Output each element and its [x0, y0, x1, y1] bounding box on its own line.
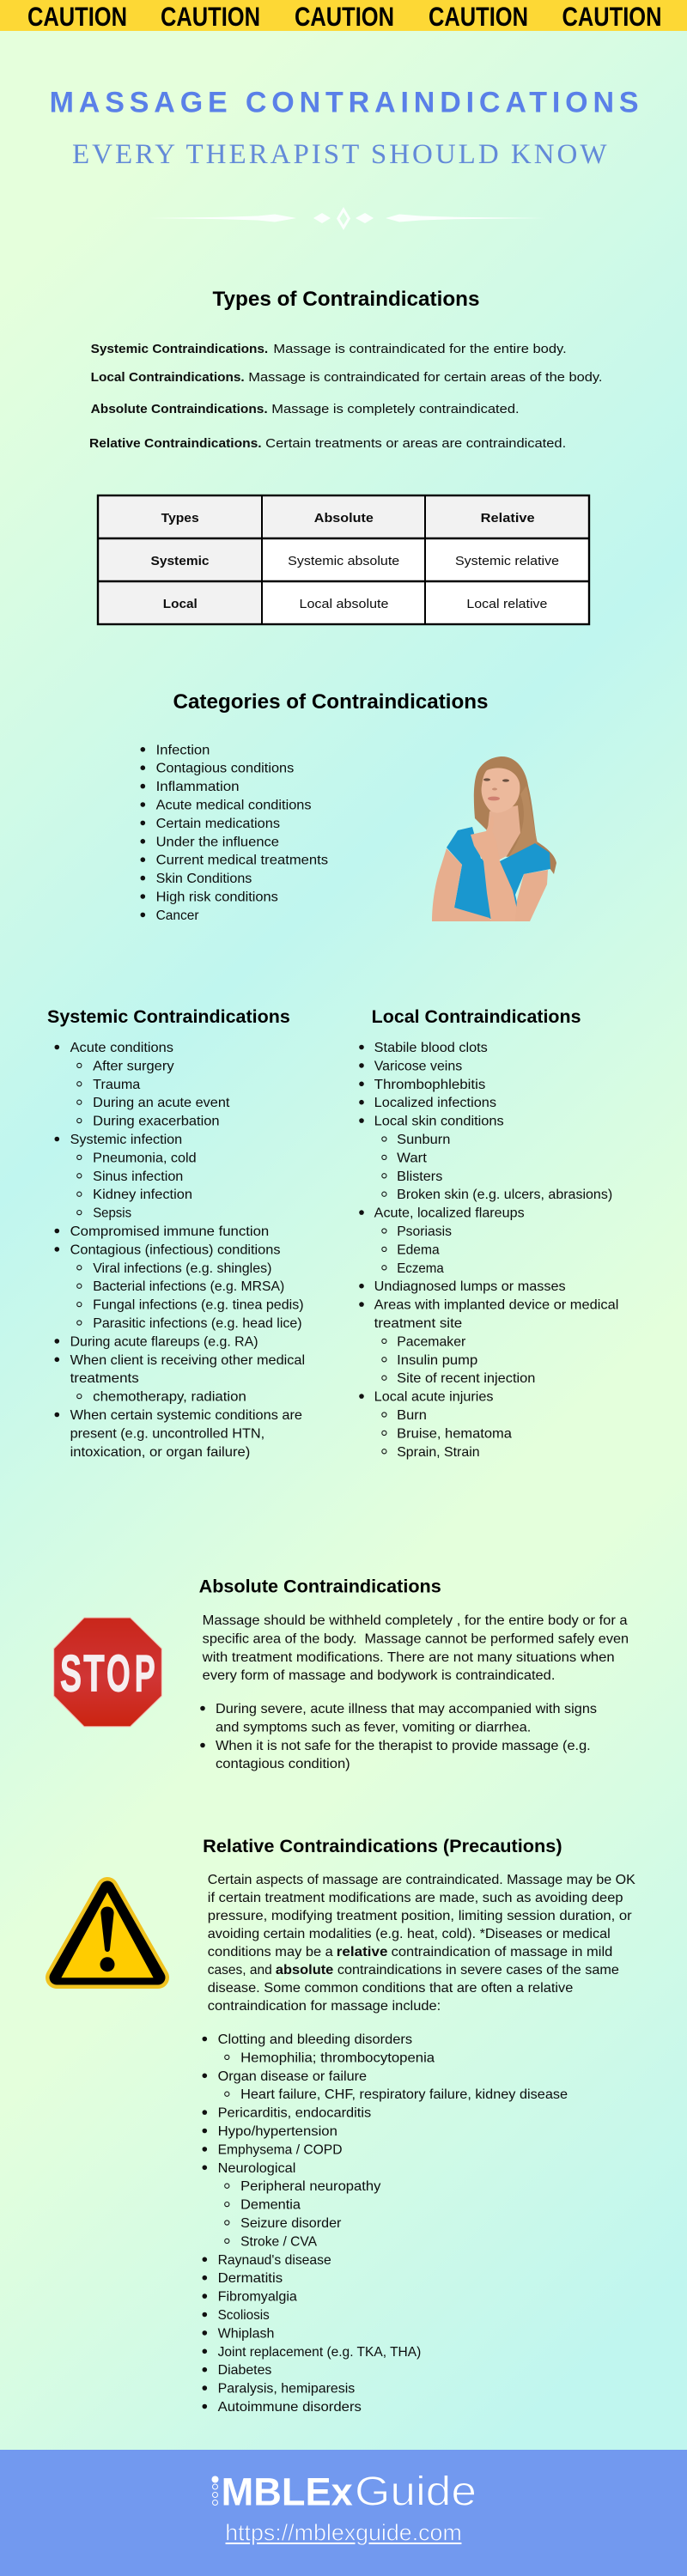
caution tape banner: CAUTION	[161, 1, 260, 32]
text block: relative description: Certain aspects of massage are contraindicated. Massage may be OK	[208, 1873, 635, 1887]
list: local: Bruise, hematoma	[397, 1426, 512, 1441]
icon: stop sign: S	[60, 1645, 82, 1702]
list: categories: Under the influence	[156, 835, 279, 849]
list: systemic: Compromised immune function	[70, 1224, 269, 1239]
text block: relative description: contraindication for massage include:	[208, 1999, 441, 2014]
list: systemic: intoxication, or organ failure)	[70, 1445, 250, 1460]
list: relative conditions: Dementia	[240, 2198, 301, 2213]
list: local: Broken skin (e.g. ulcers, abrasions)	[397, 1188, 612, 1202]
subtitle: EVERY THERAPIST SHOULD KNOW	[72, 139, 607, 170]
list: systemic: Acute conditions	[70, 1041, 173, 1055]
hair strand over neck	[508, 786, 538, 857]
list: categories: Inflammation	[156, 780, 240, 794]
list: systemic: Viral infections (e.g. shingles)	[93, 1261, 271, 1276]
text block: relative description	[208, 1873, 635, 2014]
neck and chest	[486, 805, 520, 861]
heading: relative: Relative Contraindications (Precautions)	[203, 1837, 562, 1856]
icon: stop sign: P	[135, 1645, 155, 1702]
list: relative conditions: Hemophilia; thrombocytopenia	[240, 2050, 435, 2065]
caution tape banner: CAUTION	[562, 1, 661, 32]
list: relative conditions: Hypo/hypertension	[218, 2124, 337, 2139]
list: local	[359, 1041, 618, 1460]
text block: absolute description: specific area of the body. Massage cannot be performed safely even	[203, 1631, 629, 1647]
text block: absolute description: every form of massage and bodywork is contraindicated.	[203, 1668, 555, 1683]
face	[482, 768, 520, 813]
text block: relative description: disease. Some common conditions that are often a relative	[208, 1981, 573, 1996]
list: local: Acute, localized flareups	[374, 1206, 525, 1221]
definition: local: Massage is contraindicated for certain areas of the body.	[248, 370, 603, 385]
table: types matrix: Relative	[481, 511, 535, 526]
panel: type definitions	[89, 342, 603, 451]
list: relative conditions: Peripheral neuropathy	[240, 2179, 380, 2194]
logo: MBLExGuide: MBLEx	[222, 2470, 353, 2513]
hair	[474, 756, 556, 874]
list: systemic: Sepsis	[93, 1206, 131, 1221]
definition: absolute: Massage is completely contraindicated.	[271, 402, 520, 416]
list: local: Edema	[397, 1242, 440, 1257]
list: relative conditions	[203, 2032, 568, 2415]
list: systemic: chemotherapy, radiation	[93, 1390, 246, 1405]
list: systemic: Trauma	[93, 1078, 140, 1092]
list: categories: Certain medications	[156, 817, 280, 831]
list: relative conditions: Paralysis, hemiparesis	[218, 2382, 355, 2397]
top	[447, 827, 550, 919]
list: relative conditions: Organ disease or failure	[218, 2069, 367, 2084]
list: systemic: Parasitic infections (e.g. head lice)	[93, 1316, 302, 1331]
text block: relative description: pressure, modifying treatment position, limiting session duration, or	[208, 1909, 632, 1923]
text block: absolute description: with treatment modifications. There are not many situations when	[202, 1650, 615, 1665]
heading: absolute: Absolute Contraindications	[199, 1577, 441, 1597]
table: types matrix: Local absolute	[299, 597, 388, 611]
panel: absolute contraindications	[199, 1577, 629, 1771]
definition: local: Local Contraindications.	[91, 370, 245, 385]
list: local: Stabile blood clots	[374, 1041, 488, 1055]
list: local: Site of recent injection	[397, 1371, 535, 1386]
text block: relative description: relative	[337, 1945, 388, 1959]
list: relative conditions: Fibromyalgia	[218, 2290, 297, 2305]
list: local: treatment site	[374, 1316, 462, 1331]
definition: relative: Relative Contraindications.	[89, 436, 262, 451]
caution tape banner: CAUTION	[429, 1, 528, 32]
left arm	[432, 848, 492, 921]
list: systemic	[55, 1041, 305, 1460]
list: local: Wart	[397, 1151, 427, 1165]
list: local: Undiagnosed lumps or masses	[374, 1279, 566, 1294]
list: systemic: After surgery	[93, 1059, 174, 1073]
icon: stop sign: T	[83, 1645, 105, 1702]
table: types matrix	[98, 495, 589, 624]
list: relative conditions: Stroke / CVA	[240, 2234, 317, 2249]
list: absolute situations: During severe, acute illness that may accompanied with signs	[216, 1702, 597, 1716]
text block: relative description: absolute	[276, 1963, 333, 1978]
caution tape banner: CAUTION	[27, 1, 127, 32]
heading: local: Local Contraindications	[372, 1007, 581, 1027]
list: systemic: Sinus infection	[93, 1170, 183, 1184]
heading: systemic: Systemic Contraindications	[47, 1007, 290, 1027]
list: absolute situations: When it is not safe for the therapist to provide massage (e.g.	[216, 1739, 591, 1753]
list: local: Thrombophlebitis	[374, 1078, 485, 1092]
list: local: Insulin pump	[397, 1353, 477, 1368]
list: relative conditions: Neurological	[218, 2161, 295, 2176]
list: categories: Skin Conditions	[156, 872, 252, 886]
list: systemic: Pneumonia, cold	[93, 1151, 197, 1165]
list: local: Burn	[397, 1408, 427, 1423]
list: categories: Current medical treatments	[156, 854, 328, 868]
list: local: Varicose veins	[374, 1059, 462, 1073]
list: relative conditions: Pericarditis, endocarditis	[218, 2106, 371, 2121]
text block: relative description: avoiding certain modalities (e.g. heat, cold). *Diseases or medical	[208, 1927, 611, 1941]
text block: relative description: contraindication of massage in mild	[392, 1945, 612, 1959]
list: relative conditions: Scoliosis	[218, 2308, 270, 2323]
panel: systemic contraindications	[47, 1007, 305, 1460]
list: local: Blisters	[397, 1170, 442, 1184]
list: local: Sunburn	[397, 1133, 450, 1147]
table: types matrix: Systemic	[151, 554, 210, 568]
list: relative conditions: Diabetes	[218, 2363, 271, 2378]
table: types matrix: Local	[163, 597, 198, 611]
text block: relative description: conditions may be a	[208, 1945, 333, 1959]
list: systemic: When certain systemic conditions are	[70, 1408, 302, 1423]
illustration: thinking woman	[432, 756, 556, 921]
text block: absolute description	[202, 1613, 629, 1683]
list: absolute situations	[200, 1702, 597, 1771]
list: local: Psoriasis	[397, 1224, 452, 1239]
list: relative conditions: Clotting and bleeding disorders	[218, 2032, 412, 2047]
panel: relative contraindications	[203, 1837, 635, 2415]
decorative ornament under title	[149, 207, 548, 230]
icon: stop sign	[54, 1618, 161, 1727]
text block: relative description: cases, and	[208, 1963, 272, 1978]
list: systemic: Fungal infections (e.g. tinea pedis)	[93, 1298, 304, 1313]
list: categories	[141, 743, 328, 923]
list: categories: Contagious conditions	[156, 762, 294, 776]
table: types matrix: Local relative	[466, 597, 547, 611]
list: systemic: During exacerbation	[93, 1115, 220, 1129]
panel: local contraindications	[359, 1007, 618, 1460]
list: local: Eczema	[397, 1261, 444, 1276]
list: relative conditions: Raynaud's disease	[218, 2253, 331, 2268]
definition: absolute: Absolute Contraindications.	[91, 402, 268, 416]
list: relative conditions: Whiplash	[218, 2326, 274, 2341]
caution tape banner: CAUTION	[295, 1, 394, 32]
list: systemic: Systemic infection	[70, 1133, 182, 1147]
list: relative conditions: Heart failure, CHF, respiratory failure, kidney disease	[240, 2087, 568, 2102]
table: types matrix: Types	[161, 511, 199, 526]
list: systemic: During acute flareups (e.g. RA)	[70, 1334, 258, 1349]
list: categories: Acute medical conditions	[156, 799, 312, 812]
heading: types of contraindications: Types of Contraindications	[213, 288, 479, 311]
definition: relative: Certain treatments or areas are contraindicated.	[265, 436, 566, 451]
list: local: Pacemaker	[397, 1334, 466, 1349]
list: absolute situations: and symptoms such as fever, vomiting or diarrhea.	[216, 1721, 531, 1735]
list: systemic: Kidney infection	[93, 1188, 192, 1202]
caution tape banner	[0, 0, 687, 32]
list: local: Sprain, Strain	[397, 1445, 480, 1460]
list: systemic: treatments	[70, 1371, 139, 1386]
logo: MBLExGuide	[211, 2469, 477, 2514]
footer band	[0, 2450, 687, 2576]
list: relative conditions: Emphysema / COPD	[218, 2142, 342, 2157]
definition: systemic: Massage is contraindicated for the entire body.	[273, 342, 567, 356]
list: categories: Infection	[156, 743, 210, 757]
list: categories: High risk conditions	[156, 890, 278, 905]
list: relative conditions: Seizure disorder	[240, 2216, 342, 2231]
title: MASSAGE CONTRAINDICATIONS	[50, 86, 639, 118]
icon: warning triangle	[57, 1888, 158, 1978]
website link: https://mblexguide.com	[225, 2520, 462, 2546]
list: local: Localized infections	[374, 1096, 496, 1110]
list: systemic: When client is receiving other medical	[70, 1353, 305, 1368]
text block: absolute description: Massage should be withheld completely , for the entire body or for a	[203, 1613, 628, 1628]
table: types matrix: Absolute	[314, 511, 374, 526]
table: types matrix: Systemic relative	[455, 554, 559, 568]
list: relative conditions: Dermatitis	[218, 2271, 283, 2286]
list: absolute situations: contagious condition)	[216, 1757, 350, 1771]
list: relative conditions: Joint replacement (e.g. TKA, THA)	[218, 2345, 421, 2360]
forearm and hand	[471, 816, 520, 921]
list: local: Local acute injuries	[374, 1390, 493, 1405]
list: local: Local skin conditions	[374, 1115, 504, 1129]
text block: relative description: contraindications in severe cases of the same	[337, 1963, 619, 1978]
logo: MBLExGuide: Guide	[355, 2469, 477, 2514]
table: types matrix: Systemic absolute	[288, 554, 399, 568]
list: systemic: present (e.g. uncontrolled HTN,	[70, 1426, 264, 1441]
list: local: Areas with implanted device or medical	[374, 1298, 618, 1313]
text block: relative description: if certain treatment modifications are made, such as avoiding deep	[208, 1891, 623, 1905]
list: systemic: Contagious (infectious) conditions	[70, 1242, 280, 1257]
definition: systemic: Systemic Contraindications.	[91, 342, 268, 356]
list: categories: Cancer	[156, 908, 199, 923]
list: systemic: Bacterial infections (e.g. MRSA)	[93, 1279, 284, 1294]
right upper arm	[515, 870, 548, 921]
icon: stop sign: O	[106, 1645, 131, 1702]
list: systemic: During an acute event	[93, 1096, 230, 1110]
list: relative conditions: Autoimmune disorders	[218, 2400, 362, 2415]
heading: categories of contraindications: Categories of Contraindications	[173, 690, 488, 714]
